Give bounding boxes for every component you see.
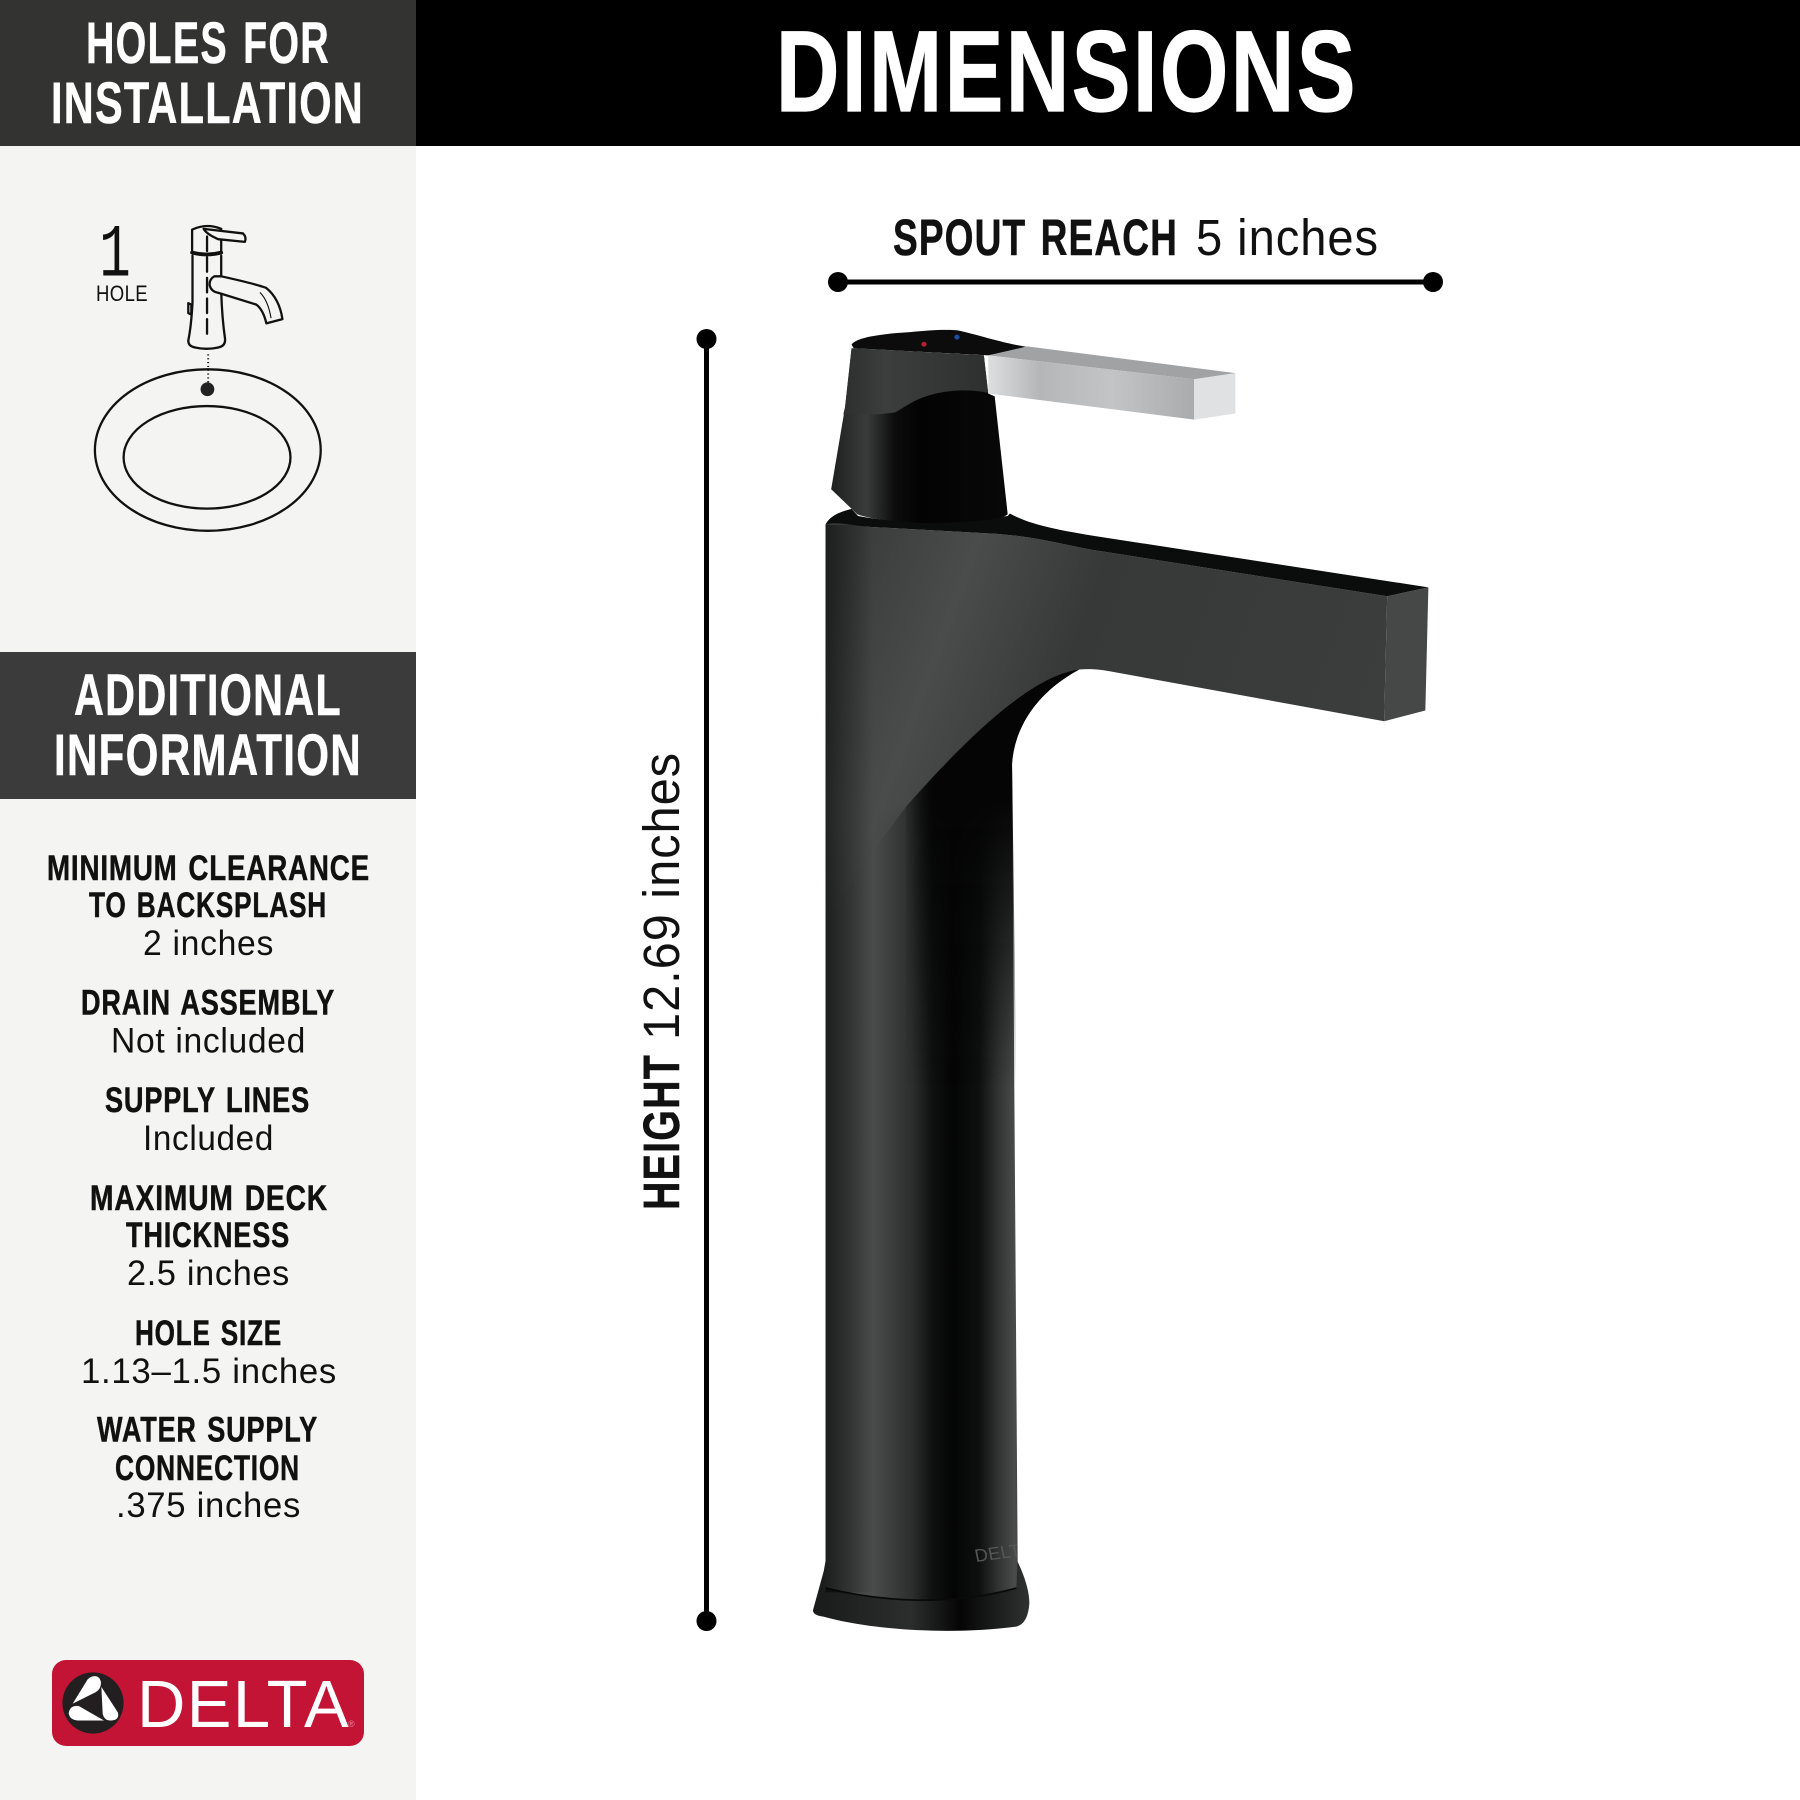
spec: minimum clearance to backsplash [47,849,370,963]
logo wordmark: DELTA [137,1667,350,1742]
faucet handle [831,330,1028,523]
hot indicator dot [921,342,927,347]
icon: faucet hole [201,382,214,396]
faucet body top surface [826,509,1428,596]
arrow: spout reach dimension line [828,272,1443,292]
spec: water supply connection: WATER SUPPLY [97,1410,318,1450]
spec: supply lines: Included [143,1119,274,1158]
spec: drain assembly: Not included [111,1022,306,1060]
spec: maximum deck thickness: THICKNESS [126,1216,290,1255]
heading: holes for installation [51,11,364,136]
spec: supply lines: SUPPLY LINES [105,1081,310,1120]
spec: minimum clearance to backsplash: MINIMUM CLEARANCE [47,849,370,888]
arrow: height dimension line [696,329,716,1631]
label: 1 hole: HOLE [96,281,148,306]
panel: holes for installation [0,0,416,146]
spec: water supply connection: .375 inches [116,1486,301,1525]
heading: additional information: INFORMATION [54,723,362,788]
heading: holes for installation: INSTALLATION [51,71,364,136]
spec: minimum clearance to backsplash: 2 inches [143,924,274,963]
panel: additional information [0,652,416,799]
spec: supply lines [105,1081,310,1158]
cold indicator dot [954,335,960,340]
faucet body bottom seam [826,1588,1016,1600]
panel: left sidebar [0,0,416,1800]
spec: maximum deck thickness [90,1179,328,1293]
logo: Delta [52,1660,364,1746]
faucet body [826,550,1079,1600]
spec: water supply connection [97,1410,318,1525]
spec: hole size [81,1314,337,1391]
spec: hole size: 1.13–1.5 inches [81,1352,337,1391]
label: spout reach: SPOUT REACH [893,209,1178,266]
label: height: HEIGHT [633,1054,690,1210]
icon: small faucet [188,226,282,383]
spec: drain assembly [81,984,335,1060]
label: height [633,752,690,1210]
icon: Delta triangle mark [69,1676,118,1721]
icon: faucet and sink with one hole [95,226,321,531]
icon: sink basin [124,406,290,509]
chrome lever [988,346,1235,420]
spec: hole size: HOLE SIZE [135,1314,282,1353]
heading: additional information: ADDITIONAL [74,663,342,728]
spec: maximum deck thickness: 2.5 inches [127,1254,290,1293]
faucet spout end face [1384,587,1428,721]
faucet base plate [813,1561,1029,1631]
panel: dimensions title bar [416,0,1800,146]
spec: drain assembly: DRAIN ASSEMBLY [81,984,335,1022]
faucet spout [826,522,1388,828]
illustration: black faucet [813,330,1428,1631]
faucet neck shadow [906,669,1079,1085]
spec: minimum clearance to backsplash: TO BACKSPLASH [89,886,327,925]
spec: water supply connection: CONNECTION [115,1449,300,1488]
title: DIMENSIONS [776,8,1358,136]
label: height: 12.69 inches [633,752,690,1040]
label: 1 hole [96,214,148,306]
heading: holes for installation: HOLES FOR [86,11,330,76]
label: spout reach: 5 inches [1196,209,1379,266]
label: 1 hole: 1 [99,214,131,299]
icon: sink outer rim [95,369,321,531]
logo: Delta: ® [348,1719,355,1729]
spec: maximum deck thickness: MAXIMUM DECK [90,1179,328,1218]
heading: additional information [54,663,362,788]
engraved brand mark: DELTA [973,1539,1034,1566]
